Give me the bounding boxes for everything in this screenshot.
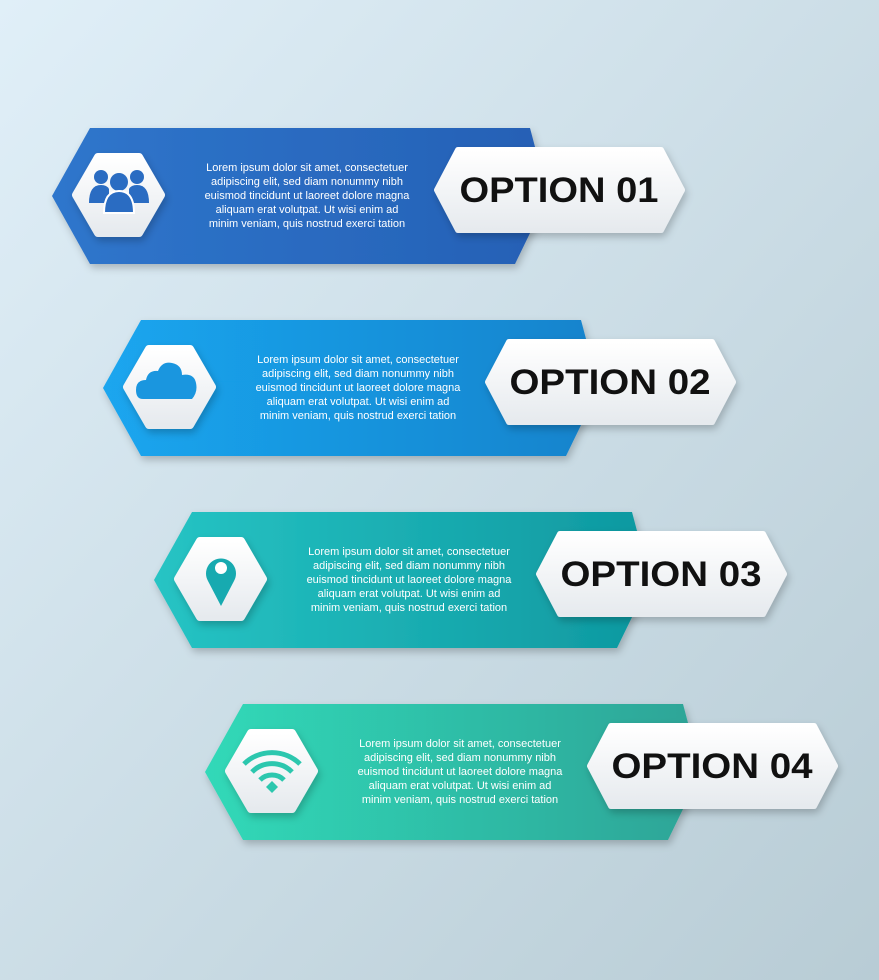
text block 02: Lorem ipsum dolor sit amet, consectetuer bbox=[257, 354, 459, 366]
text block 04: Lorem ipsum dolor sit amet, consectetuer bbox=[359, 738, 561, 750]
text block 04: euismod tincidunt ut laoreet dolore magna bbox=[358, 766, 563, 778]
label: option 04: OPTION 04 bbox=[612, 747, 813, 786]
icon: wifi bbox=[229, 733, 314, 809]
icon: location pin bbox=[178, 541, 263, 617]
label: option 02: OPTION 02 bbox=[510, 363, 710, 402]
text block 03: aliquam erat volutpat. Ut wisi enim ad bbox=[318, 588, 500, 600]
text block 02: aliquam erat volutpat. Ut wisi enim ad bbox=[267, 396, 449, 408]
text block 01: adipiscing elit, sed diam nonummy nibh bbox=[211, 176, 403, 188]
text block 02: minim veniam, quis nostrud exerci tation bbox=[260, 410, 456, 422]
icon: cloud bbox=[127, 349, 212, 425]
text block 04: minim veniam, quis nostrud exerci tation bbox=[362, 794, 558, 806]
text block 01: minim veniam, quis nostrud exerci tation bbox=[209, 218, 405, 230]
icon: people bbox=[76, 157, 161, 233]
text block 04: aliquam erat volutpat. Ut wisi enim ad bbox=[369, 780, 551, 792]
text block 03: Lorem ipsum dolor sit amet, consectetuer bbox=[308, 546, 510, 558]
label: option 01 bbox=[437, 150, 682, 230]
panel: option 04 bbox=[205, 704, 835, 840]
text block 02: adipiscing elit, sed diam nonummy nibh bbox=[262, 368, 454, 380]
panel: option 02 bbox=[103, 320, 733, 456]
label: option 02 bbox=[488, 342, 733, 422]
label: option 04 bbox=[590, 726, 835, 806]
text block 03: adipiscing elit, sed diam nonummy nibh bbox=[313, 560, 505, 572]
text block 01: Lorem ipsum dolor sit amet, consectetuer bbox=[206, 162, 408, 174]
text block 04: adipiscing elit, sed diam nonummy nibh bbox=[364, 752, 556, 764]
text block 02: euismod tincidunt ut laoreet dolore magna bbox=[256, 382, 461, 394]
text block 03: euismod tincidunt ut laoreet dolore magna bbox=[307, 574, 512, 586]
label: option 01: OPTION 01 bbox=[460, 171, 658, 210]
label: option 03 bbox=[539, 534, 784, 614]
text block 03: minim veniam, quis nostrud exerci tation bbox=[311, 602, 507, 614]
label: option 03: OPTION 03 bbox=[560, 555, 762, 594]
panel: option 03 bbox=[154, 512, 784, 648]
panel: option 01 bbox=[52, 128, 682, 264]
text block 01: euismod tincidunt ut laoreet dolore magna bbox=[205, 190, 410, 202]
text block 01: aliquam erat volutpat. Ut wisi enim ad bbox=[216, 204, 398, 216]
